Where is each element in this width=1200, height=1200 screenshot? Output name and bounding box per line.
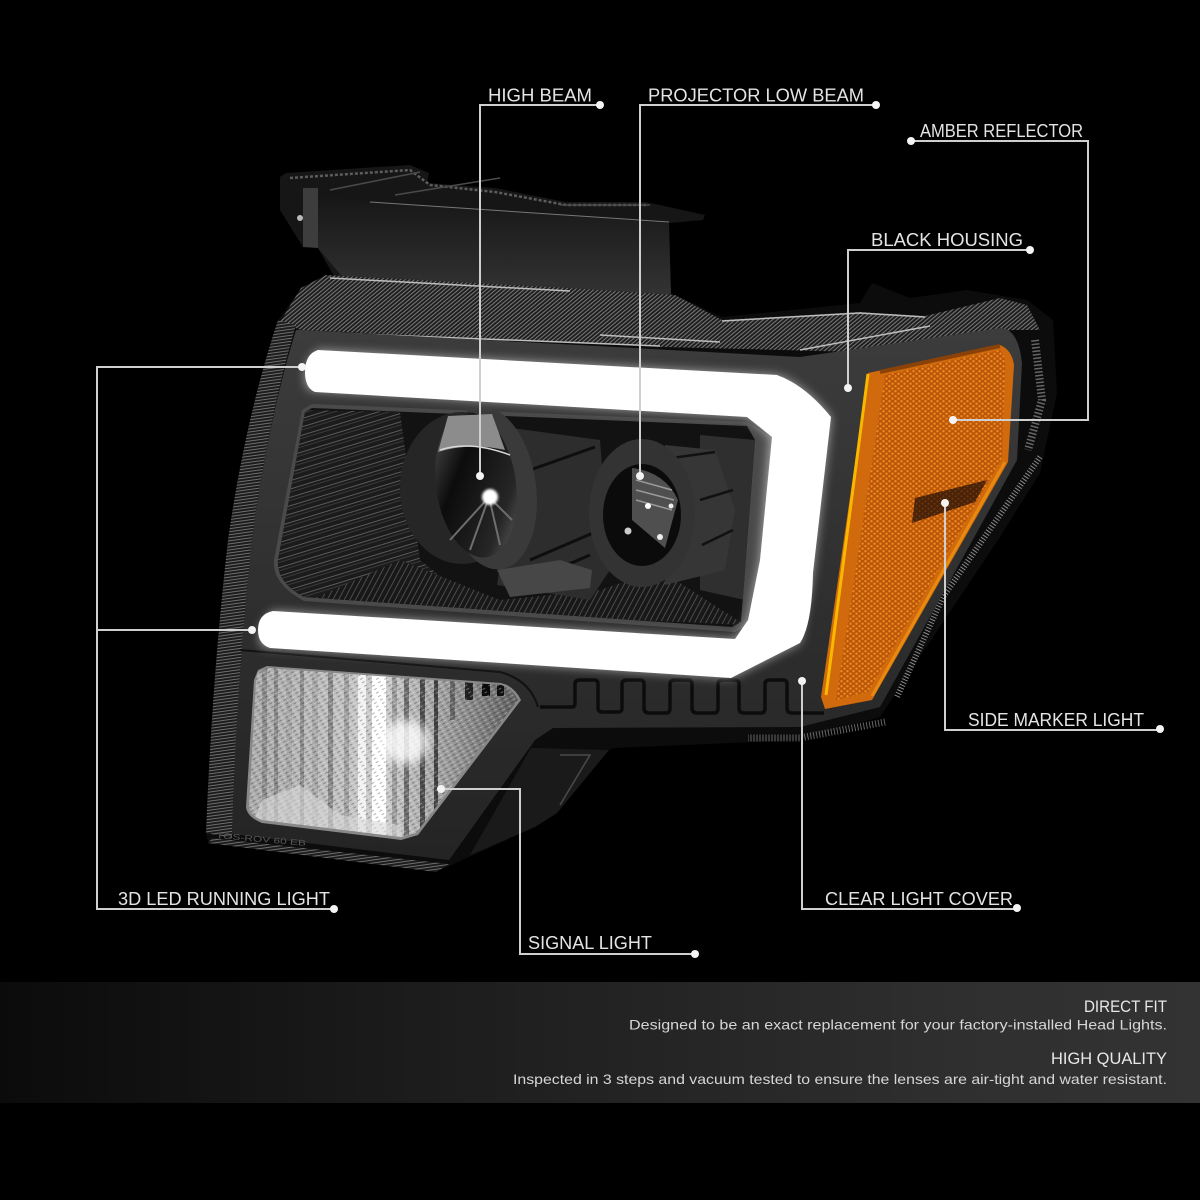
callout: projector low beam (636, 86, 880, 480)
callout: clear light cover: CLEAR LIGHT COVER (825, 889, 1013, 909)
callout: side marker light (941, 499, 1164, 733)
right louvre fill (700, 435, 755, 600)
callout: 3D LED running light (97, 363, 338, 913)
small print: TOS-ROV 60 EB (216, 831, 306, 848)
feature: high quality (513, 1049, 1167, 1087)
louvres left (278, 410, 438, 598)
signal lamp lens (246, 666, 521, 840)
amber reflector (821, 345, 1014, 709)
icon: high beam reflector (400, 400, 547, 576)
callout: signal light: SIGNAL LIGHT (528, 933, 652, 953)
feature: high quality: Inspected in 3 steps and vacuum tested to ensure the lenses are air-tight and water resistant. (513, 1071, 1167, 1087)
callout: amber reflector (907, 121, 1088, 424)
left textured strip (206, 320, 296, 838)
feature: high quality: HIGH QUALITY (1051, 1049, 1167, 1068)
housing ridge above signal (240, 650, 538, 707)
callout: black housing (844, 230, 1034, 392)
headlight assembly (206, 165, 1057, 872)
callout: 3D LED running light: 3D LED RUNNING LIGHT (118, 889, 330, 909)
callout: clear light cover (798, 677, 1021, 912)
feature: direct fit: DIRECT FIT (1084, 997, 1167, 1016)
louvres lower (300, 560, 745, 625)
icon: projector low beam (589, 439, 735, 587)
feature: direct fit: Designed to be an exact replacement for your factory-installed Head Lights. (629, 1016, 1167, 1032)
callout: high beam (476, 86, 604, 480)
black housing face (232, 328, 1022, 860)
callout: side marker light: SIDE MARKER LIGHT (968, 710, 1144, 730)
side marker window (912, 480, 987, 523)
feature band (0, 982, 1200, 1103)
projector recess (270, 400, 772, 632)
centre shroud (490, 425, 610, 600)
LED running light bar (258, 350, 831, 678)
callout: amber reflector: AMBER REFLECTOR (920, 121, 1083, 141)
lower mount (470, 748, 609, 855)
right rim texture (897, 457, 1040, 697)
grooved trim (540, 680, 824, 713)
callout: high beam: HIGH BEAM (488, 86, 592, 106)
chrome highlights (310, 278, 930, 350)
feature: direct fit (629, 997, 1167, 1032)
mounting bracket (280, 165, 705, 300)
chrome upper strip (280, 275, 1040, 352)
callout: signal light (437, 785, 699, 958)
callout: projector low beam: PROJECTOR LOW BEAM (648, 86, 864, 106)
housing body (206, 275, 1057, 872)
lower edge texture (208, 838, 449, 872)
callout: black housing: BLACK HOUSING (871, 230, 1023, 250)
